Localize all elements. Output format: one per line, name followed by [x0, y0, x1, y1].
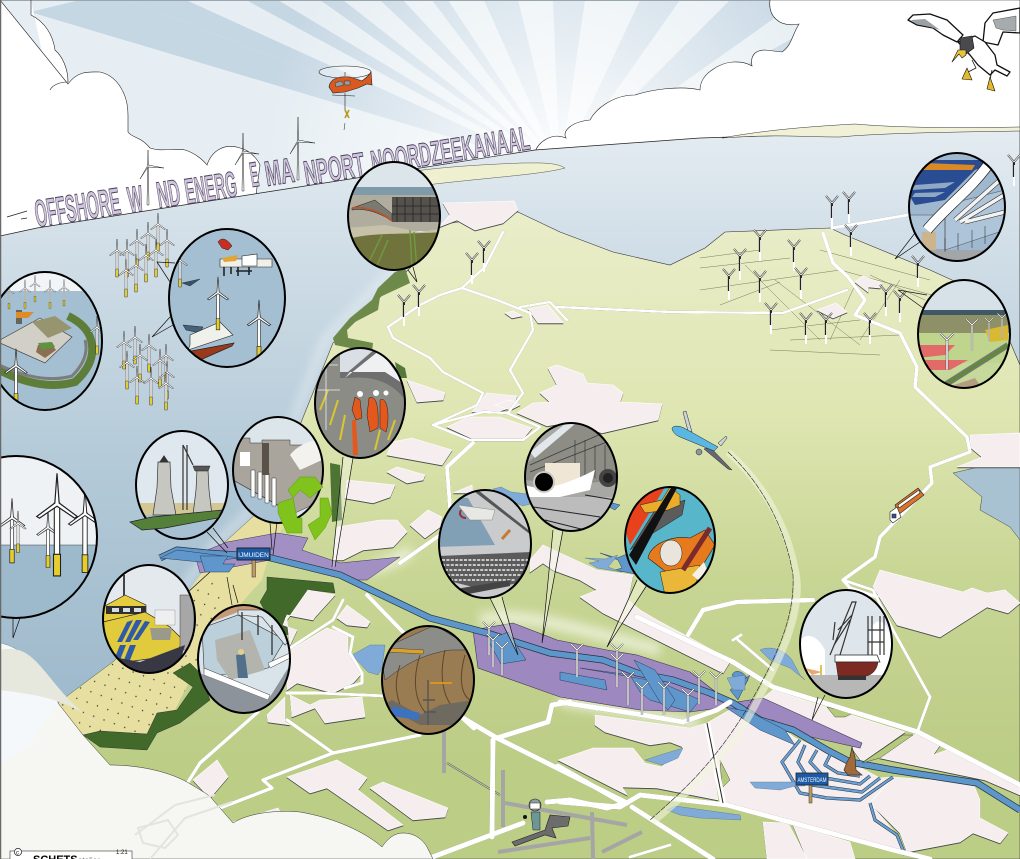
green patches in Amsterdam	[720, 707, 913, 788]
port zone: purple Amsterdam harbour	[473, 623, 862, 748]
title: offshore wind energie mainport noordzeekanaal: ND	[154, 172, 183, 216]
cloud: left	[0, 0, 260, 240]
title: offshore wind energie mainport noordzeekanaal	[7, 119, 532, 236]
sky with sun rays	[0, 0, 1020, 300]
right-hand inland water	[953, 465, 1020, 540]
beach	[58, 428, 315, 735]
bubble: concrete foundations on quay	[130, 428, 235, 543]
title: offshore wind energie mainport noordzeekanaal: ENERG	[182, 163, 240, 212]
turbines: Amsterdam harbour	[483, 622, 722, 722]
title: offshore wind energie mainport noordzeekanaal: MA	[262, 151, 297, 194]
bubble: turbine blades factory	[908, 152, 1006, 262]
bubble: energy island	[0, 270, 105, 415]
polder field lines	[700, 250, 950, 355]
sandbar	[397, 163, 565, 187]
bubble: yellow patrol ship	[102, 564, 196, 674]
icon: green recycling arrows	[278, 477, 332, 540]
turbines standing in the title as letters I	[140, 117, 315, 205]
bubble: interior control room	[197, 604, 291, 714]
copyright tag: 1:21	[116, 850, 128, 856]
bubble: aircraft hangar	[524, 422, 618, 532]
coastal glow	[182, 262, 400, 590]
flight path of aircraft	[650, 452, 797, 822]
roads	[188, 215, 1020, 859]
land mass	[58, 212, 1020, 859]
sign: IJmuiden	[237, 548, 270, 577]
bubble: offshore platform and ships	[165, 225, 290, 370]
turbines: wind farm on Wieringermeer	[398, 155, 1020, 344]
bubble: sea rescue crew	[624, 486, 716, 594]
polder plots near Wieringermeer	[817, 276, 882, 318]
picture edge	[0, 0, 2, 859]
sign: Amsterdam	[796, 773, 828, 803]
copyright tag	[10, 848, 132, 859]
bubble: refinery recycling plant	[230, 415, 325, 525]
icon: airplane	[672, 411, 732, 470]
glow around the port	[370, 550, 700, 725]
bubble: brown tunnel tube	[381, 625, 475, 735]
dunes: dark green	[83, 577, 335, 750]
bubble: harbour building at Den Helder	[345, 160, 445, 272]
bubble: wind turbines among fields	[917, 279, 1011, 389]
icon: seagull	[908, 8, 1020, 91]
bubble: port stacked goods	[435, 488, 535, 602]
airport Schiphol runways	[444, 730, 642, 859]
sign: Amsterdam: AMSTERDAM	[798, 778, 826, 784]
title: offshore wind energie mainport noordzeekanaal: E	[247, 155, 261, 195]
bubble leader lines	[13, 233, 927, 720]
harbour basins	[160, 497, 795, 745]
copyright tag: c	[16, 850, 19, 856]
offshore turbine clusters	[110, 213, 174, 410]
ponds and lakes	[352, 487, 805, 820]
title: offshore wind energie mainport noordzeekanaal: OFFSHORE	[32, 181, 123, 236]
bubble: large offshore turbines	[0, 455, 102, 620]
text: NOORDZEEKANAAL	[368, 119, 532, 181]
dunes: north coast strip	[333, 268, 410, 352]
cloud: right	[535, 0, 1020, 152]
icon: truck carrying turbine blades	[890, 488, 924, 523]
fog in the foreground	[0, 643, 433, 859]
icon: Amsterdam church tower	[844, 747, 862, 775]
sign: IJmuiden: IJMUIDEN	[238, 552, 269, 559]
bubble: jack-up installation ship	[799, 589, 893, 699]
towns	[193, 201, 1020, 859]
bubble: tunnel workers in orange	[314, 347, 406, 459]
canal: Noordzeekanaal	[160, 550, 1020, 810]
port zone: purple IJmuiden	[195, 533, 400, 580]
icon: helicopter with winch	[319, 66, 372, 130]
road with rail centre line	[707, 723, 723, 803]
title: offshore wind energie mainport noordzeekanaal: W	[125, 178, 146, 221]
Amsterdam canal rings	[782, 740, 905, 855]
far land strip on the horizon	[722, 124, 1020, 138]
title: offshore wind energie mainport noordzeekanaal: NPORT	[301, 146, 368, 193]
